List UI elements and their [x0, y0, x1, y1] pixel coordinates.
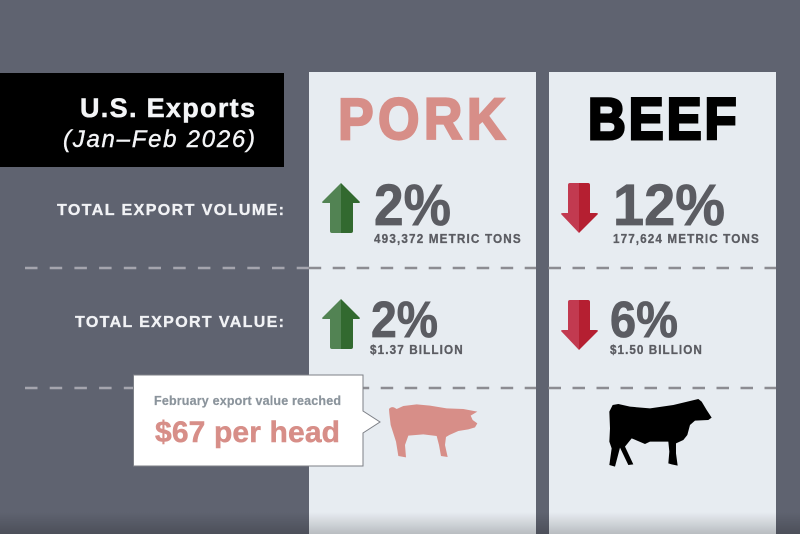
icon: beef value down arrow [561, 300, 598, 350]
icon: pig [389, 404, 477, 457]
callout text: value: $67 per head [155, 416, 340, 449]
stat: pork volume tons: 493,372 METRIC TONS [374, 231, 521, 246]
icon: beef volume down arrow [561, 183, 598, 233]
callout text: caption: February export value reached [154, 394, 341, 408]
title: U.S. Exports: U.S. Exports [80, 93, 255, 123]
panel: pork column [309, 72, 536, 534]
icon: pork value up arrow [322, 299, 360, 349]
icon: pork volume up arrow [322, 183, 360, 233]
stat: beef volume tons: 177,624 METRIC TONS [613, 231, 759, 246]
stat: pork volume change: 2% [374, 173, 451, 238]
row label: total export value: TOTAL EXPORT VALUE: [75, 314, 284, 331]
callout [134, 375, 380, 466]
stat: beef value amount: $1.50 BILLION [610, 342, 702, 357]
heading: pork: PORK [338, 87, 505, 151]
panel: beef column [549, 72, 776, 534]
heading: beef: BEEF [588, 86, 737, 152]
stat: pork value amount: $1.37 BILLION [370, 342, 463, 357]
subtitle: date range: (Jan–Feb 2026) [63, 126, 255, 153]
stat: beef value change: 6% [610, 291, 678, 348]
row label: total export volume: TOTAL EXPORT VOLUME: [57, 202, 284, 219]
stat: beef volume change: 12% [613, 173, 725, 238]
title block [0, 73, 284, 167]
icon: cow [609, 399, 712, 467]
stat: pork value change: 2% [371, 291, 438, 348]
